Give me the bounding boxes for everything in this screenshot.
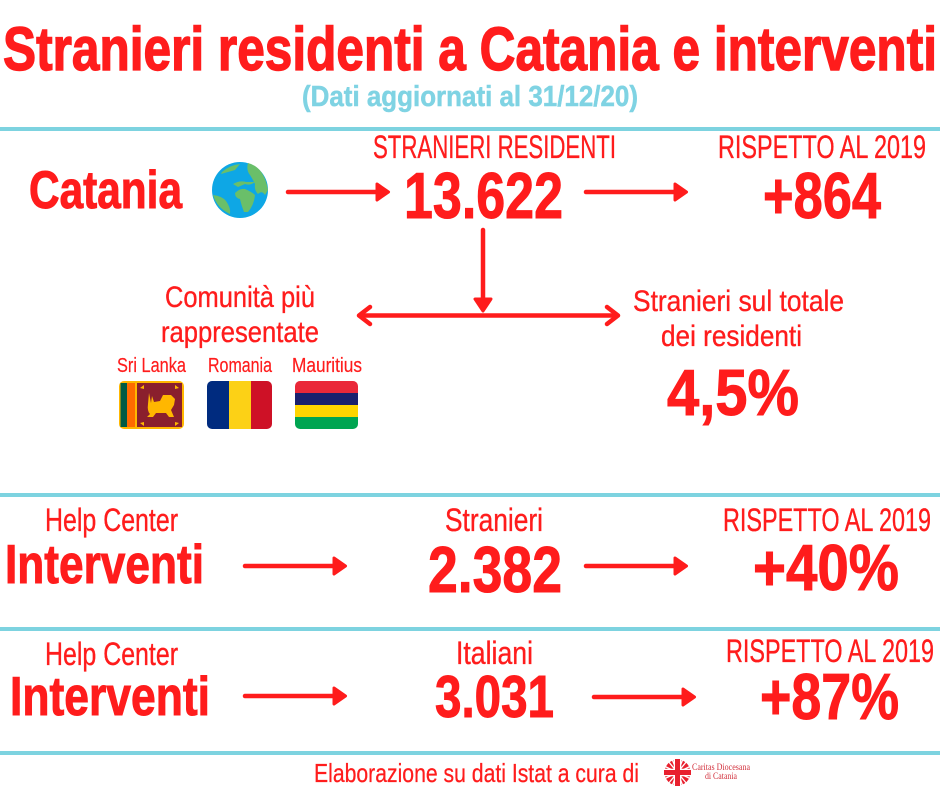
arrow	[288, 184, 388, 200]
arrow	[586, 184, 686, 200]
arrow	[245, 688, 346, 704]
communities heading: Comunità più	[165, 281, 315, 314]
interventi: Interventi	[10, 665, 210, 727]
arrow: down	[475, 230, 491, 311]
number 2.382: 2.382	[428, 533, 562, 606]
share heading	[633, 285, 844, 353]
arrow: double	[359, 307, 618, 324]
panel: interventi italiani	[10, 633, 934, 733]
Caritas name	[692, 762, 750, 781]
number 13.622: 13.622	[404, 159, 563, 232]
source text: Elaborazione su dati Istat a cura di	[314, 758, 639, 788]
Caritas name: Caritas Diocesana	[692, 762, 750, 772]
subtitle: (Dati aggiornati al 31/12/20)	[302, 81, 638, 113]
stranieri residenti heading: STRANIERI RESIDENTI	[373, 129, 616, 165]
panel: Catania	[29, 129, 926, 429]
number +87%: +87%	[760, 660, 899, 733]
interventi: Interventi	[5, 533, 204, 595]
flag: Sri Lanka	[119, 381, 184, 429]
flag: Mauritius	[295, 381, 358, 429]
arrow	[245, 558, 346, 574]
label Sri Lanka: Sri Lanka	[117, 355, 187, 377]
label Romania: Romania	[208, 355, 273, 377]
number +40%: +40%	[753, 531, 899, 604]
icon: globe	[212, 162, 268, 218]
flag: Romania	[207, 381, 272, 429]
footer	[314, 758, 750, 788]
italiani: Italiani	[456, 635, 533, 671]
stranieri: Stranieri	[445, 502, 543, 538]
number +864: +864	[763, 159, 881, 232]
arrow	[594, 689, 694, 705]
arrow	[586, 558, 686, 574]
communities heading: rappresentate	[161, 316, 319, 349]
label Mauritius: Mauritius	[292, 355, 362, 377]
number 4,5%: 4,5%	[667, 356, 799, 429]
help center: Help Center	[45, 636, 178, 672]
icon: Caritas logo	[663, 758, 692, 787]
Catania label: Catania	[29, 161, 182, 220]
panel: interventi stranieri	[5, 502, 931, 606]
share heading: dei residenti	[661, 320, 802, 353]
Caritas name: di Catania	[705, 771, 737, 781]
number 3.031: 3.031	[435, 664, 554, 730]
help center: Help Center	[45, 502, 178, 538]
communities heading	[161, 281, 319, 349]
share heading: Stranieri sul totale	[633, 285, 844, 318]
